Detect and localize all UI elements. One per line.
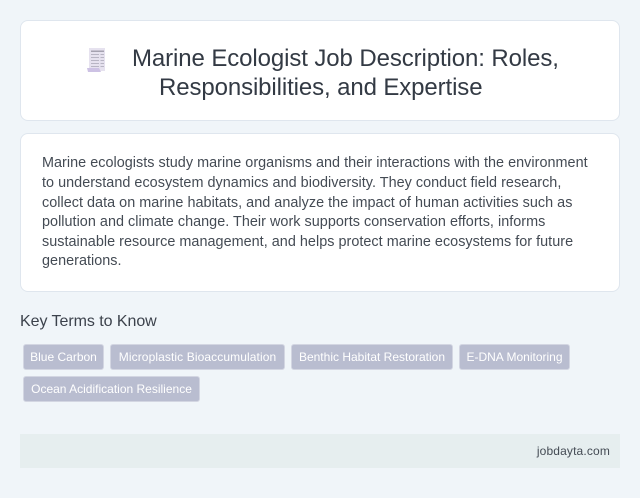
tag: Microplastic Bioaccumulation: [119, 350, 276, 364]
tag list: [23, 344, 570, 402]
tag: [291, 344, 453, 370]
description text: to understand ecosystem dynamics and biodiversity. They conduct field research,: [42, 175, 561, 191]
title line 2: Responsibilities, and Expertise: [159, 74, 482, 101]
footer source: jobdayta.com: [537, 444, 610, 458]
panel: title card: [20, 20, 620, 121]
description text: generations.: [42, 253, 122, 269]
description text: collect data on marine habitats, and analyze the impact of human activities such as: [42, 195, 572, 211]
panel: description: [20, 133, 620, 292]
description text: Marine ecologists study marine organisms and their interactions with the environment: [42, 155, 588, 171]
description text: [42, 155, 588, 269]
tag: E-DNA Monitoring: [466, 350, 563, 364]
tag: Benthic Habitat Restoration: [299, 350, 445, 364]
description text: sustainable resource management, and helps protect marine ecosystems for future: [42, 234, 573, 250]
tag: Blue Carbon: [30, 350, 97, 364]
description text: pollution and climate change. Their work supports conservation efforts, informs: [42, 214, 545, 230]
icon: document scroll: [87, 48, 105, 72]
tag: [23, 376, 200, 402]
tag: [23, 344, 104, 370]
title line 1: Marine Ecologist Job Description: Roles,: [132, 45, 559, 72]
heading: key terms: Key Terms to Know: [20, 313, 157, 330]
tag: Ocean Acidification Resilience: [31, 382, 192, 396]
tag: [459, 344, 570, 370]
tag: [110, 344, 285, 370]
footer bar: [20, 434, 620, 468]
